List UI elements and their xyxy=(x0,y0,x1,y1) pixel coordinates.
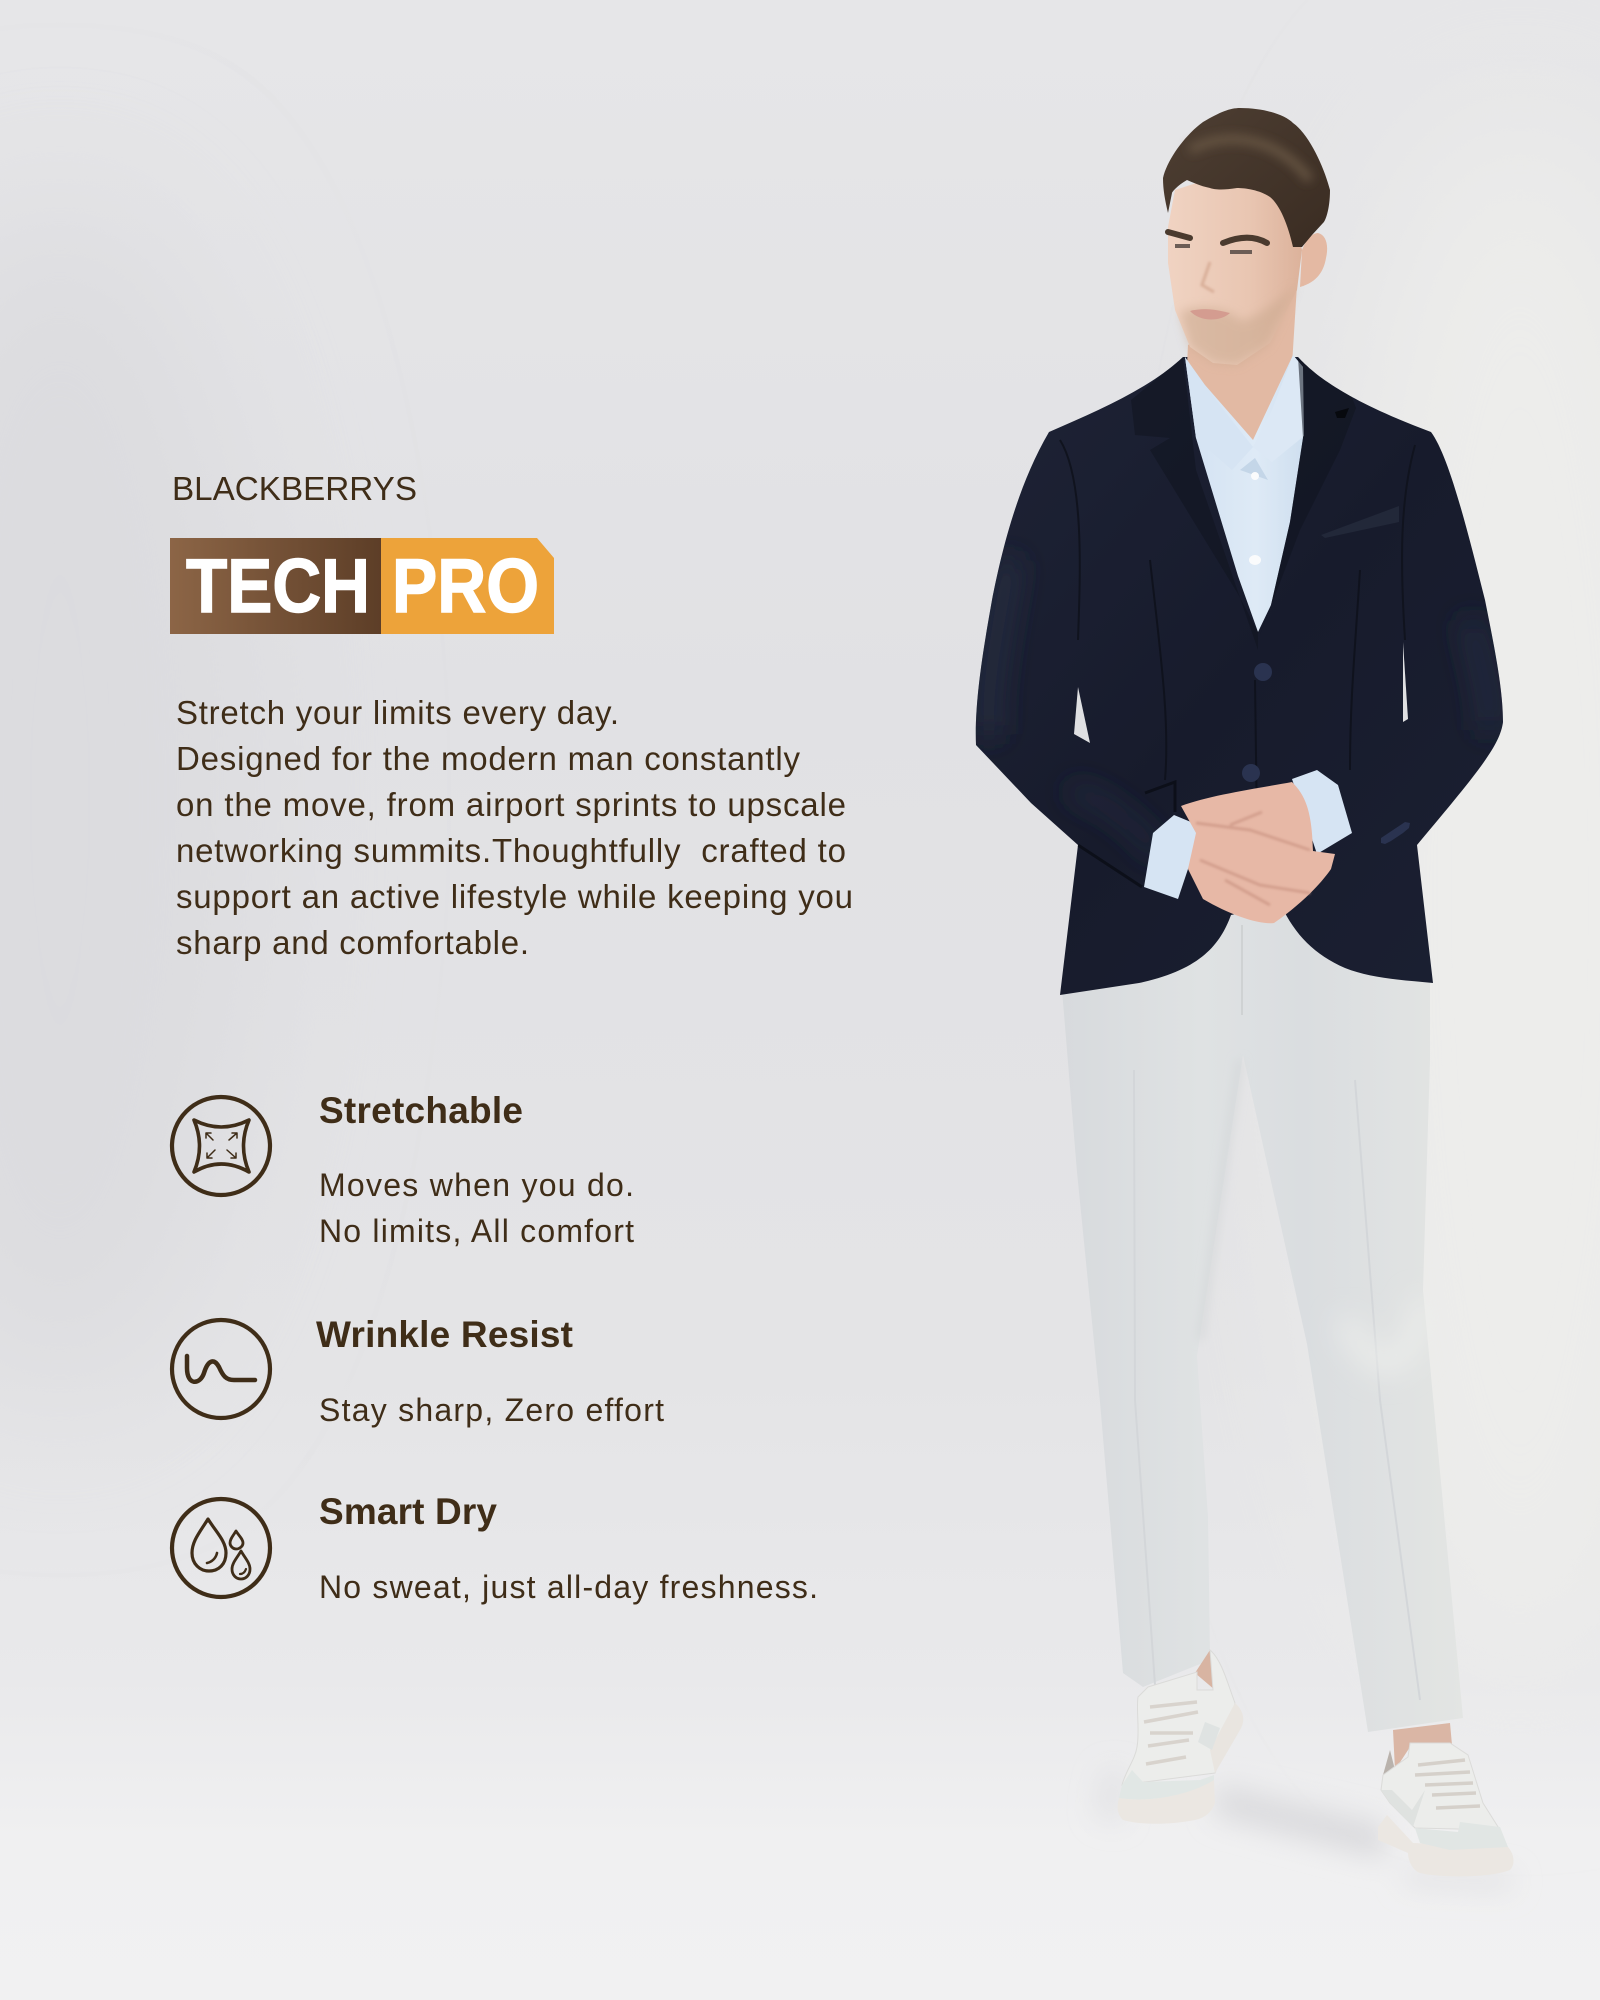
intro paragraph: Designed for the modern man constantly xyxy=(176,740,800,777)
intro paragraph xyxy=(176,694,853,961)
intro paragraph: sharp and comfortable. xyxy=(176,924,529,961)
right shoe xyxy=(1378,1723,1514,1876)
icon: stretchable fabric xyxy=(172,1097,270,1195)
lapels xyxy=(1131,357,1356,650)
brand name: BLACKBERRYS xyxy=(172,470,417,507)
neck xyxy=(1187,285,1297,442)
breast pocket xyxy=(1321,506,1399,538)
feature: stretchable: Stretchable xyxy=(319,1090,523,1131)
intro paragraph: on the move, from airport sprints to upscale xyxy=(176,786,846,823)
icon: wrinkle resist wave xyxy=(172,1320,270,1418)
feature: stretchable: No limits, All comfort xyxy=(319,1213,634,1249)
logo: Tech Pro badge: PRO xyxy=(392,544,539,629)
feature: smart dry: No sweat, just all-day freshness. xyxy=(319,1569,818,1605)
left shoe xyxy=(1118,1650,1243,1824)
floor shadows xyxy=(1095,1770,1515,1890)
cuffs xyxy=(1144,770,1352,899)
head xyxy=(1163,108,1330,365)
feature: wrinkle resist: Stay sharp, Zero effort xyxy=(319,1392,664,1428)
model photo illustration xyxy=(976,108,1515,1890)
body gaps beside the arms xyxy=(1074,642,1408,743)
feature: smart dry: Smart Dry xyxy=(319,1491,497,1532)
feature: wrinkle resist xyxy=(316,1314,664,1428)
clasped hands xyxy=(1181,782,1335,923)
intro paragraph: Stretch your limits every day. xyxy=(176,694,619,731)
feature: wrinkle resist: Wrinkle Resist xyxy=(316,1314,573,1355)
intro paragraph: support an active lifestyle while keeping you xyxy=(176,878,853,915)
jacket shading and seams xyxy=(989,440,1490,905)
jacket buttons xyxy=(1242,663,1410,844)
icon: smart dry droplets xyxy=(172,1499,270,1597)
feature: stretchable: Moves when you do. xyxy=(319,1167,634,1203)
feature: stretchable xyxy=(319,1090,634,1249)
feature: smart dry xyxy=(319,1491,818,1605)
logo: Tech Pro badge xyxy=(170,538,554,634)
intro paragraph: networking summits.Thoughtfully crafted to xyxy=(176,832,846,869)
shirt placket xyxy=(1185,355,1304,632)
jacket body and sleeves xyxy=(976,357,1503,995)
trousers xyxy=(1062,900,1463,1732)
logo: Tech Pro badge: TECH xyxy=(186,544,370,629)
